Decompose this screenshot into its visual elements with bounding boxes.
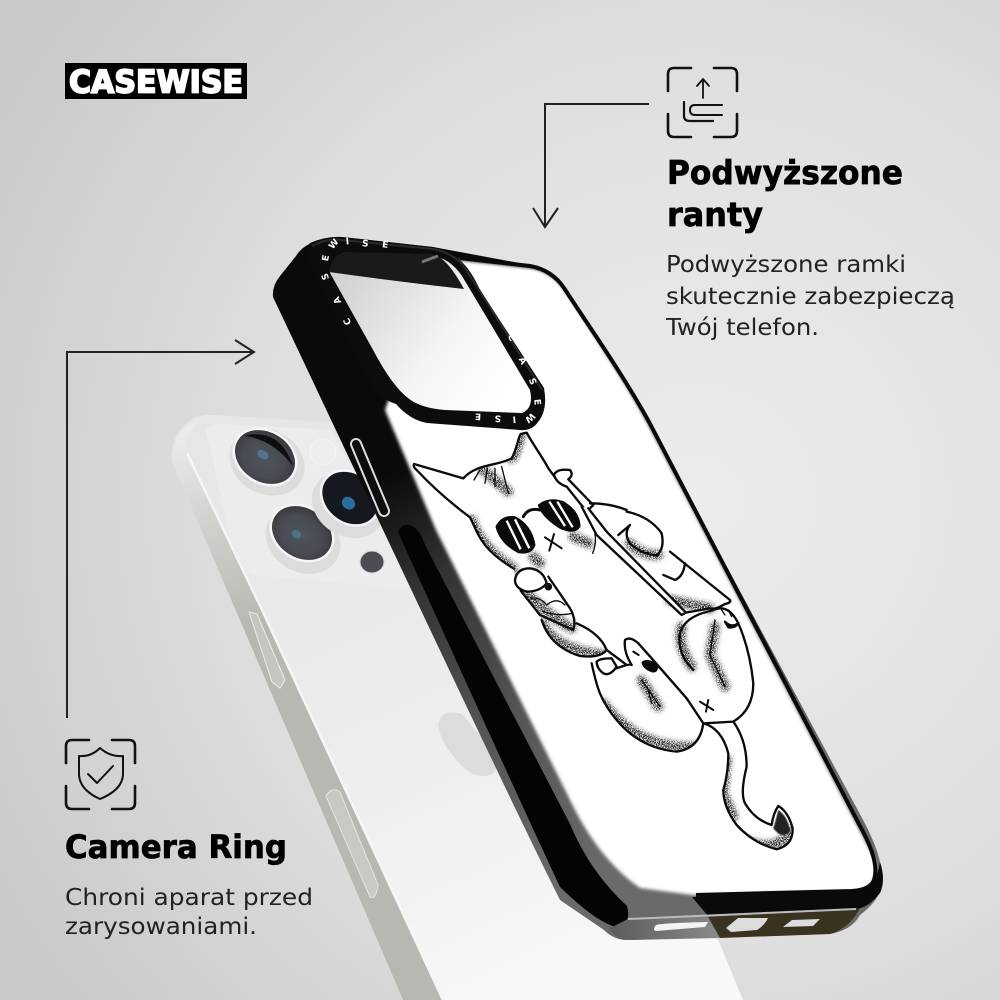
text: camera ring description xyxy=(65,885,313,940)
lens bottom housing xyxy=(253,493,353,587)
head xyxy=(414,464,513,568)
case body xyxy=(273,237,882,940)
apple logo xyxy=(438,712,500,776)
camera plateau xyxy=(206,424,420,590)
transparent case xyxy=(273,237,883,940)
lower paw xyxy=(515,568,547,592)
upper paw xyxy=(618,512,663,556)
lens top left housing xyxy=(218,415,316,509)
camera ring xyxy=(307,237,545,430)
logo: CASEWISE xyxy=(69,64,243,100)
side button upper xyxy=(249,612,285,688)
phone back surface xyxy=(172,415,743,1000)
ring inner wall xyxy=(329,252,464,289)
phone side band xyxy=(172,419,443,1000)
case button xyxy=(356,444,384,511)
usb port xyxy=(726,918,768,932)
lens right xyxy=(310,459,390,537)
ring lettering right: CASEWISE xyxy=(475,333,542,424)
tail xyxy=(703,722,793,849)
small foot xyxy=(597,658,617,674)
side highlight xyxy=(187,453,443,1000)
club handle xyxy=(554,470,593,512)
speaker right xyxy=(783,919,820,927)
lens right housing xyxy=(299,459,397,551)
bottom side olive xyxy=(708,908,860,938)
lens right xyxy=(538,500,580,531)
sensor xyxy=(360,551,384,573)
icon: shield xyxy=(66,740,135,809)
lens top left xyxy=(223,417,307,497)
heading: raised edges line two: ranty xyxy=(667,195,763,234)
arrow: top to case xyxy=(533,104,649,227)
screen white xyxy=(385,258,876,895)
cat illustration xyxy=(414,433,793,849)
ring body xyxy=(307,237,545,430)
lower arm xyxy=(542,620,607,656)
text: raised edges description: Twój telefon. xyxy=(665,315,819,341)
sunglasses xyxy=(496,500,580,553)
arrow: camera to case xyxy=(67,340,254,718)
flash xyxy=(310,439,336,465)
text: raised edges description xyxy=(665,252,955,341)
ring bevel xyxy=(312,240,542,390)
black inner band xyxy=(398,525,628,927)
bottom side grey xyxy=(610,917,720,940)
shading xyxy=(472,434,793,846)
ring wall highlight xyxy=(422,256,438,262)
icon: raised edges xyxy=(668,68,737,137)
bottom highlight xyxy=(628,909,856,919)
text: camera ring description: zarysowaniami. xyxy=(65,914,257,940)
bridge xyxy=(523,509,540,517)
port holes xyxy=(654,918,820,932)
ring opening xyxy=(330,255,531,413)
lens stripes xyxy=(507,502,573,549)
lens left xyxy=(496,516,535,553)
text: raised edges description: skutecznie zabezpieczą xyxy=(666,284,955,310)
text: camera ring description: Chroni aparat przed xyxy=(65,885,313,911)
bottom black band xyxy=(692,862,883,916)
x mark xyxy=(700,700,713,712)
back phone xyxy=(172,415,743,1000)
upper arm and strap xyxy=(590,503,627,510)
heading: camera ring: Camera Ring xyxy=(65,828,287,866)
side button lower xyxy=(326,790,378,898)
lens bottom xyxy=(260,493,344,573)
right leg xyxy=(679,608,753,723)
heading: raised edges: Podwyższone xyxy=(667,153,903,192)
head stripes xyxy=(474,467,508,493)
text: raised edges description: Podwyższone ramki xyxy=(666,252,906,278)
x eye xyxy=(545,534,562,551)
right rim xyxy=(460,258,875,895)
speaker left xyxy=(654,922,708,931)
left leg xyxy=(592,639,703,752)
ring lettering left: CASEWISE xyxy=(321,237,389,326)
